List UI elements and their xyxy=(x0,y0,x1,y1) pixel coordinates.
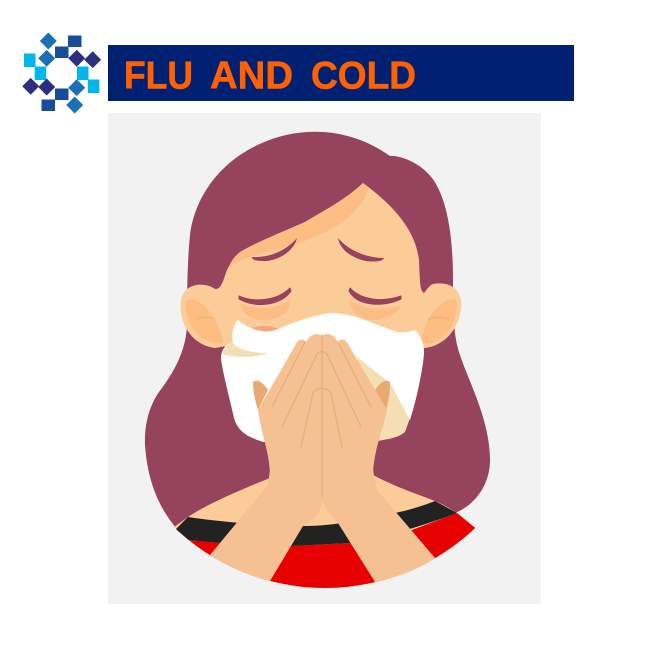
eye: left xyxy=(239,288,291,305)
eyebrow: left xyxy=(252,238,297,261)
nose tip xyxy=(252,326,279,333)
finger lines xyxy=(272,335,371,497)
arm: right xyxy=(321,470,435,582)
title banner xyxy=(108,45,574,101)
tissue: front fold left xyxy=(222,342,268,357)
hair xyxy=(145,132,490,560)
tissue mask xyxy=(221,313,424,442)
praying hands xyxy=(258,334,387,500)
icon: company logo xyxy=(22,33,101,113)
illustration: woman sneezing into tissue xyxy=(145,132,490,600)
ear: left xyxy=(181,285,232,348)
eyebrow: right xyxy=(338,238,384,262)
thumb: right xyxy=(375,381,390,410)
forehead shadow xyxy=(227,183,369,270)
title: FLU xyxy=(124,54,193,98)
face xyxy=(215,183,425,380)
shirt and neck xyxy=(174,476,476,588)
arm: left xyxy=(210,470,323,581)
title: COLD xyxy=(311,54,416,98)
under-eye shadow: left xyxy=(240,300,290,320)
under-eye shadow: right xyxy=(350,300,400,320)
tissue: back fold right xyxy=(340,350,410,441)
shirt: red stripe xyxy=(188,513,476,588)
neck and shoulders xyxy=(174,476,472,546)
eye: right xyxy=(349,288,401,304)
thumb: left xyxy=(253,381,268,410)
shirt: black stripe xyxy=(170,501,457,546)
panel: illustration background xyxy=(108,113,541,604)
title xyxy=(124,54,416,98)
ear: right xyxy=(410,283,461,348)
title: AND xyxy=(210,54,293,98)
